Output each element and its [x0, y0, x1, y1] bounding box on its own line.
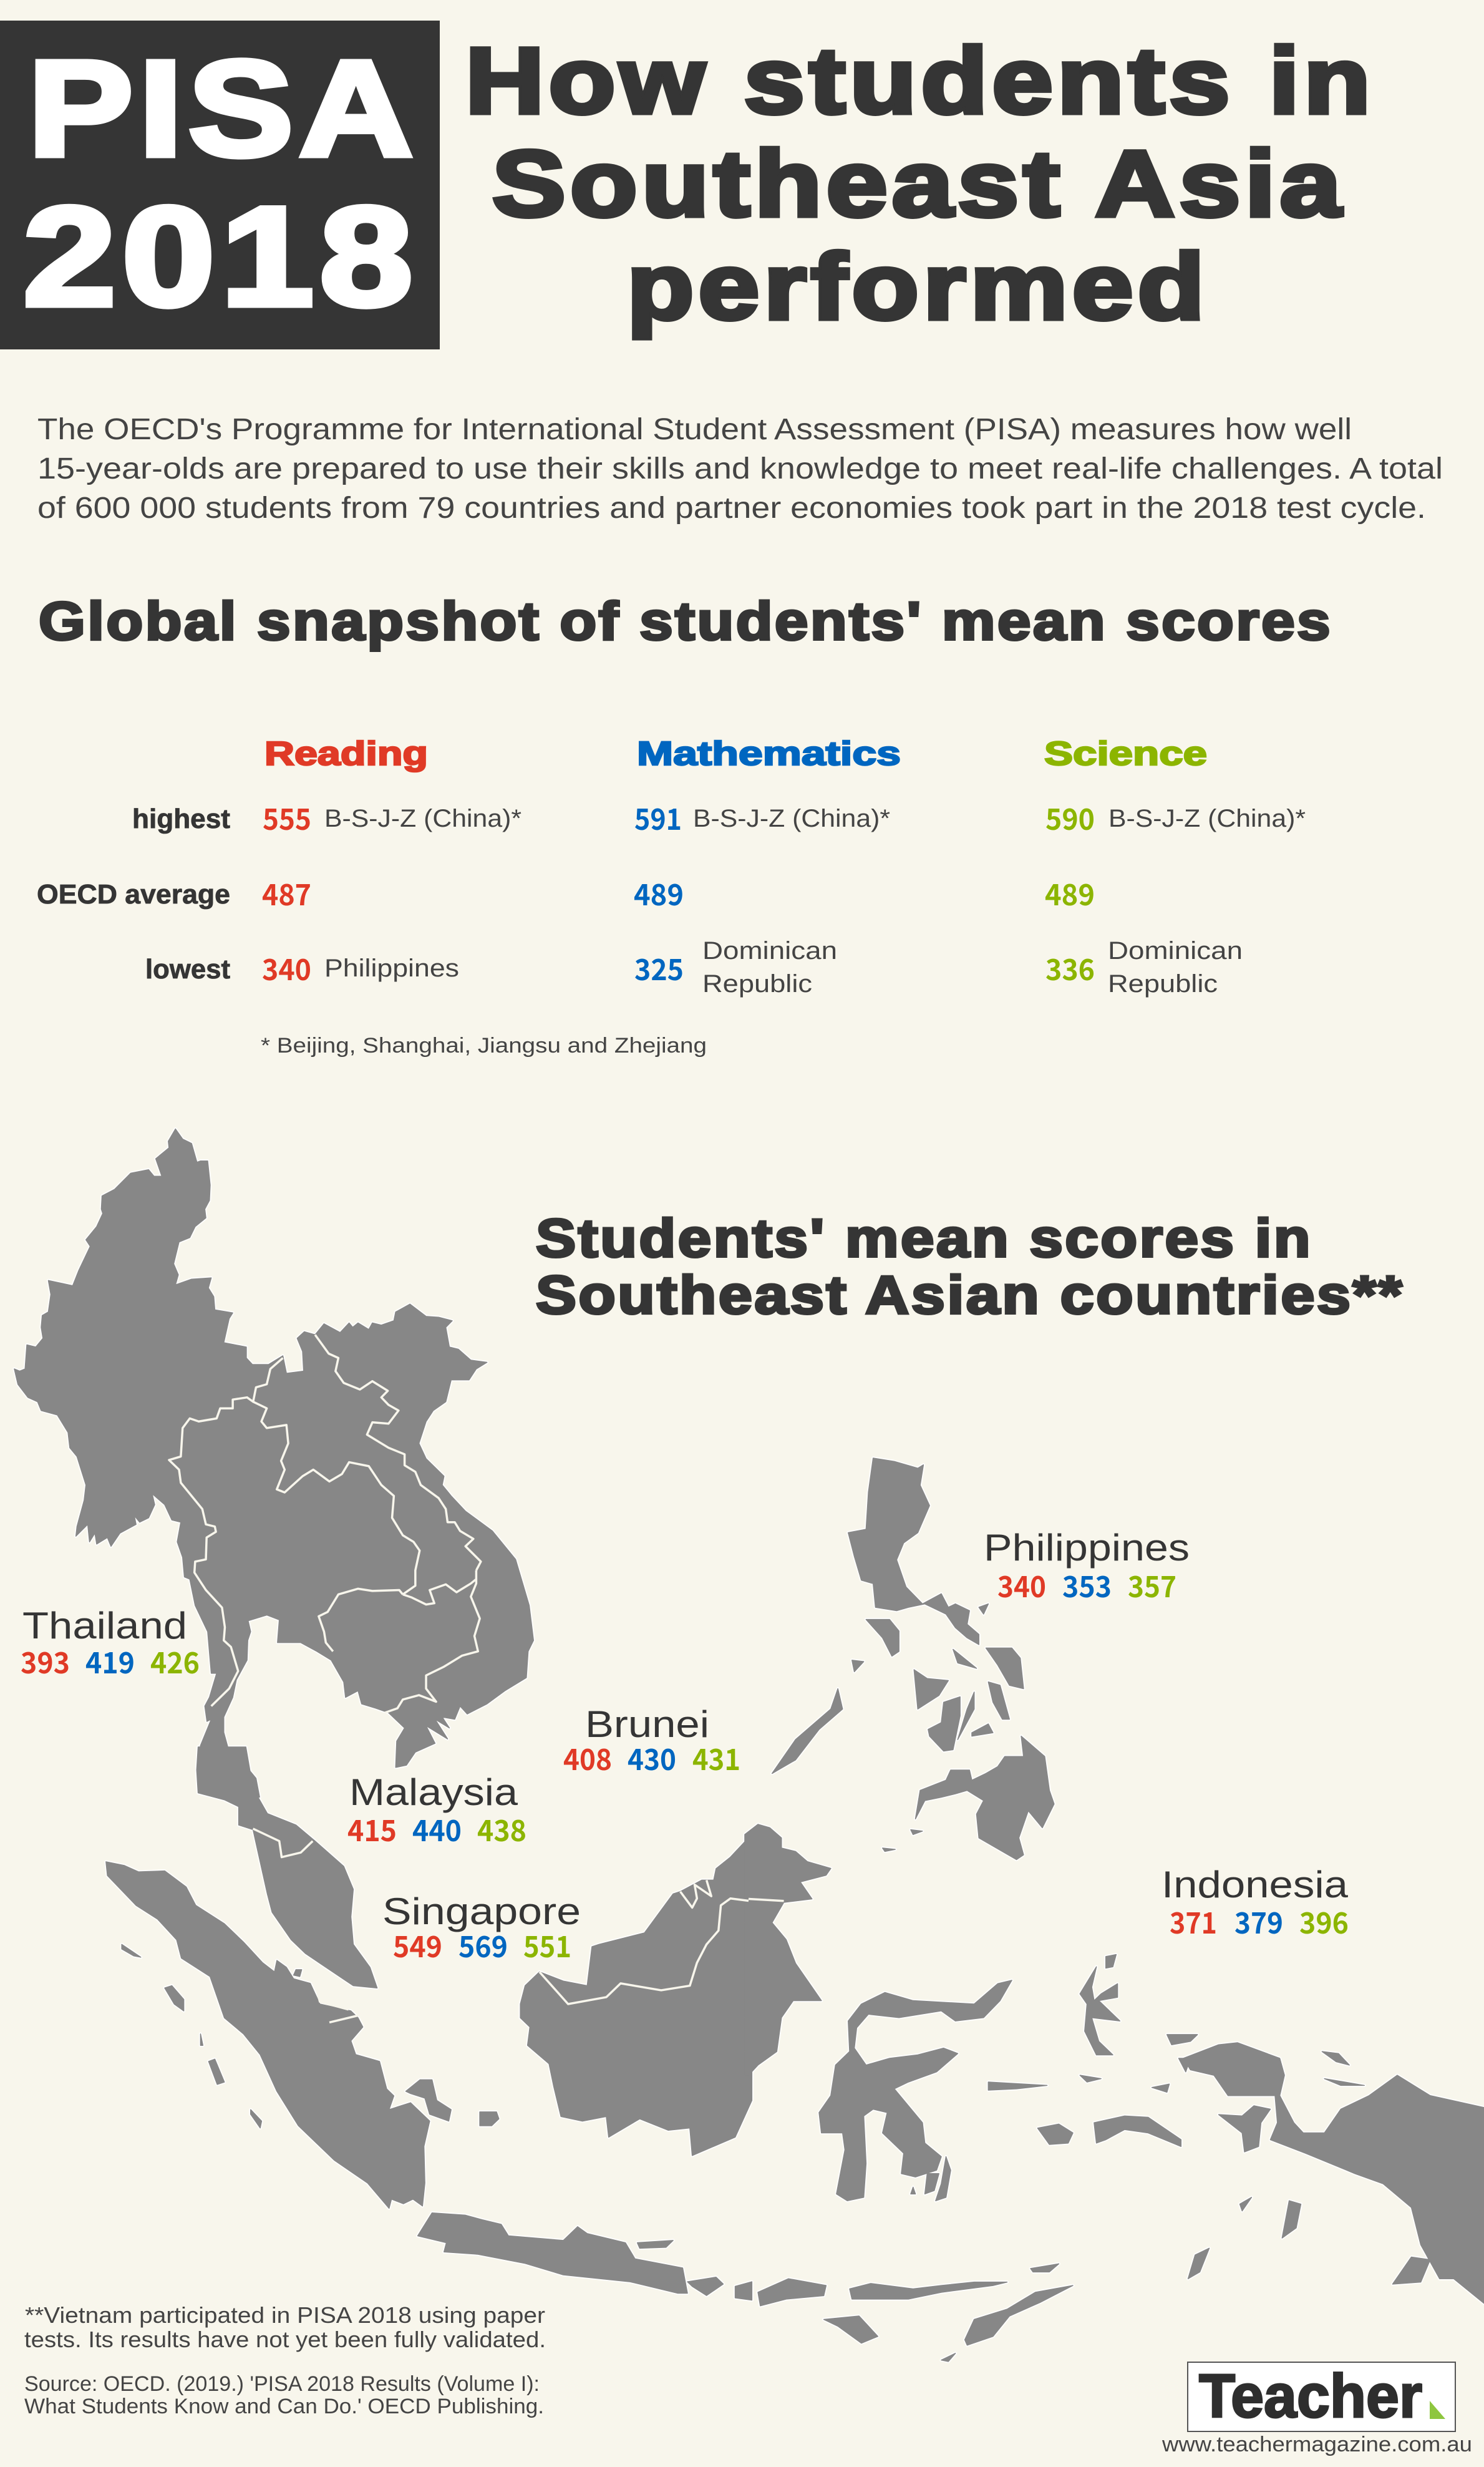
label: Brunei: 431: [692, 1736, 740, 1779]
heading: global snapshot: Global snapshot of students' mean scores: [39, 591, 1332, 651]
label: Indonesia: [1161, 1864, 1349, 1942]
title: Southeast Asia: [492, 131, 1346, 236]
reading scores: B-S-J-Z (China)*: [324, 805, 521, 832]
mathematics scores: 325: [634, 946, 684, 989]
title: [465, 28, 1375, 339]
footnote: Vietnam: **Vietnam participated in PISA 2018 using paper: [25, 2302, 545, 2328]
label: Indonesia: 396: [1299, 1899, 1349, 1942]
science scores: 590: [1045, 796, 1095, 839]
mathematics scores: 489: [634, 871, 684, 914]
website url: www.teachermagazine.com.au: [1161, 2433, 1472, 2456]
heading: Southeast Asian scores: Students' mean scores in: [536, 1209, 1312, 1268]
science scores: Dominican: [1108, 937, 1243, 965]
header box: PISA 2018: PISA: [28, 33, 419, 185]
intro paragraph: of 600 000 students from 79 countries and partner economies took part in the 2018 test cycle.: [37, 492, 1426, 525]
label: Thailand: Thailand: [22, 1605, 187, 1647]
row labels: lowest: [145, 954, 230, 985]
label: Malaysia: 415: [347, 1807, 397, 1850]
science scores: B-S-J-Z (China)*: [1108, 805, 1306, 832]
reading scores: 555: [263, 796, 311, 839]
label: Singapore: 549: [393, 1923, 442, 1966]
title: performed: [627, 234, 1209, 339]
label: Brunei: [563, 1703, 740, 1779]
heading: Southeast Asian scores: Southeast Asian countries**: [536, 1265, 1404, 1325]
mathematics scores: Dominican: [702, 937, 837, 965]
icon: green triangle: [1430, 2401, 1445, 2419]
table: global snapshot of mean scores: [37, 735, 1306, 1058]
label: Singapore: [382, 1890, 581, 1966]
label: Indonesia: 379: [1234, 1899, 1283, 1942]
label: Thailand: [21, 1605, 200, 1682]
label: Philippines: 340: [997, 1563, 1046, 1606]
label: Thailand: 426: [150, 1639, 200, 1682]
science scores: Republic: [1108, 970, 1218, 998]
science scores: 489: [1045, 871, 1095, 914]
heading: Southeast Asian scores: [536, 1209, 1404, 1325]
intro paragraph: [37, 413, 1443, 525]
label: Philippines: 357: [1128, 1563, 1176, 1606]
label: Malaysia: [347, 1771, 526, 1850]
map: Southeast Asia: [14, 1129, 1484, 2362]
column heading: Science: Science: [1044, 735, 1207, 772]
label: Philippines: 353: [1062, 1563, 1112, 1606]
source note: [24, 2372, 544, 2418]
mathematics scores: 591: [634, 796, 682, 839]
label: Malaysia: Malaysia: [349, 1771, 518, 1813]
label: Singapore: Singapore: [382, 1890, 581, 1932]
row labels: [37, 804, 230, 985]
intro paragraph: 15-year-olds are prepared to use their skills and knowledge to meet real-life challenges. A total: [37, 452, 1443, 485]
reading scores: Philippines: [324, 955, 459, 982]
mathematics scores: B-S-J-Z (China)*: [693, 805, 890, 832]
reading scores: 487: [262, 871, 311, 914]
label: Thailand: 419: [85, 1639, 135, 1682]
footnote: Vietnam: [24, 2302, 546, 2352]
science scores: [1045, 796, 1306, 998]
mathematics scores: Republic: [702, 970, 812, 998]
header box: PISA 2018: 2018: [23, 177, 419, 335]
label: Indonesia: 371: [1170, 1899, 1217, 1942]
mathematics scores: [634, 796, 890, 998]
label: Philippines: Philippines: [984, 1527, 1190, 1569]
title: How students in: [465, 28, 1375, 133]
label: Indonesia: Indonesia: [1161, 1864, 1349, 1905]
row labels: OECD average: [37, 879, 230, 910]
source note: Source: OECD. (2019.) 'PISA 2018 Results (Volume I):: [24, 2372, 540, 2396]
label: Philippines: [984, 1527, 1190, 1606]
source note: What Students Know and Can Do.' OECD Publishing.: [24, 2395, 544, 2418]
footnote: Vietnam: tests. Its results have not yet been fully validated.: [24, 2327, 546, 2352]
label: Singapore: 551: [523, 1923, 571, 1966]
label: Brunei: 408: [563, 1736, 612, 1779]
column heading: Reading: Reading: [264, 735, 428, 772]
label: Brunei: 430: [628, 1736, 676, 1779]
reading scores: 340: [262, 946, 311, 989]
table footnote: * Beijing, Shanghai, Jiangsu and Zhejiang: [261, 1034, 707, 1058]
label: Malaysia: 440: [412, 1807, 462, 1850]
label: Brunei: Brunei: [585, 1703, 709, 1745]
label: Malaysia: 438: [477, 1807, 526, 1850]
science scores: 336: [1045, 946, 1095, 989]
label: Thailand: 393: [21, 1639, 70, 1682]
logo: Teacher: Teacher: [1199, 2362, 1422, 2430]
reading scores: [262, 796, 521, 989]
column heading: Mathematics: Mathematics: [637, 735, 901, 772]
header box: PISA 2018: [0, 21, 440, 349]
intro paragraph: The OECD's Programme for International Student Assessment (PISA) measures how well: [37, 413, 1352, 446]
label: Singapore: 569: [458, 1923, 508, 1966]
row labels: highest: [132, 804, 230, 834]
